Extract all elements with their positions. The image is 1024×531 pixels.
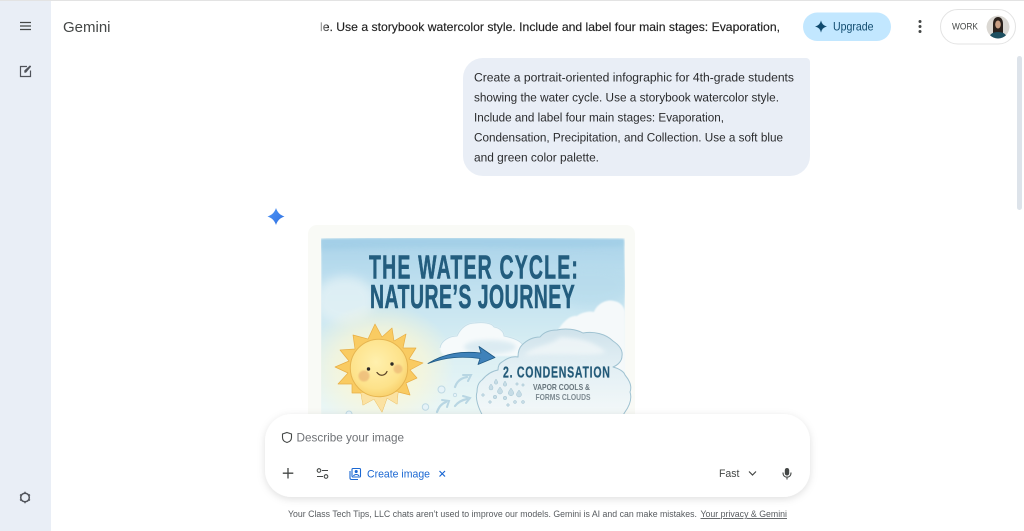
icon: image stack [350,468,360,480]
conversation title: le. Use a storybook watercolor style. Include and label four main stages: Evaporation, [320,20,780,34]
water droplets [482,379,524,406]
condensation cloud [476,329,631,420]
mode selector: Fast [719,468,740,480]
user prompt bubble: Create a portrait-oriented infographic for 4th-grade students [474,70,794,84]
icon: more options [918,20,922,33]
icon: microphone [783,468,791,480]
account chip: WORK [952,22,979,32]
user prompt bubble: showing the water cycle. Use a storybook watercolor style. [474,90,779,104]
cloud label: 2. CONDENSATION [503,363,610,381]
title [369,255,576,308]
image paper card [308,225,635,435]
footer disclaimer: Your Class Tech Tips, LLC chats aren’t used to improve our models. Gemini is AI and can make mistakes. [288,509,697,519]
scrollbar [1017,56,1022,210]
icon: Gemini spark [268,208,284,225]
sun illustration [335,324,423,412]
placeholder text: Describe your image [296,430,404,444]
create image chip: Create image [367,468,430,480]
icon: settings gear [20,492,30,503]
title: NATURE’S JOURNEY [370,278,575,315]
upgrade button: Upgrade [833,20,874,34]
icon: new chat [20,66,31,76]
watercolor sky wash [321,238,625,414]
upgrade button [803,12,891,41]
icon: menu [20,22,31,30]
evaporation vapor arrows and bubbles [346,375,471,417]
header background [0,1,1024,51]
icon: close [440,471,445,476]
top edge line [0,0,1024,1]
cloud caption: VAPOR COOLS & [533,382,590,392]
user prompt bubble: Include and label four main stages: Evaporation, [474,110,724,124]
header title: Gemini: Gemini [63,19,110,36]
arrow from sun to cloud [428,346,495,364]
privacy link: Your privacy & Gemini [700,509,787,519]
cloud caption: FORMS CLOUDS [536,392,591,402]
user prompt bubble [463,58,810,176]
icon: tools [317,469,328,478]
create image chip [350,468,445,480]
sidebar [0,1,51,531]
title: THE WATER CYCLE: [369,248,578,286]
avatar [986,16,1010,40]
user prompt bubble: and green color palette. [474,150,599,164]
generated image: water cycle infographic [308,225,635,414]
prompt composer [265,414,810,497]
icon: plus [283,468,293,478]
account chip [940,10,1016,44]
mode selector [719,468,756,480]
back clouds [440,301,625,372]
cloud caption [533,384,590,400]
user prompt bubble: Condensation, Precipitation, and Collection. Use a soft blue [474,130,783,144]
icon: shield [282,432,292,442]
icon: upgrade spark [816,22,826,32]
